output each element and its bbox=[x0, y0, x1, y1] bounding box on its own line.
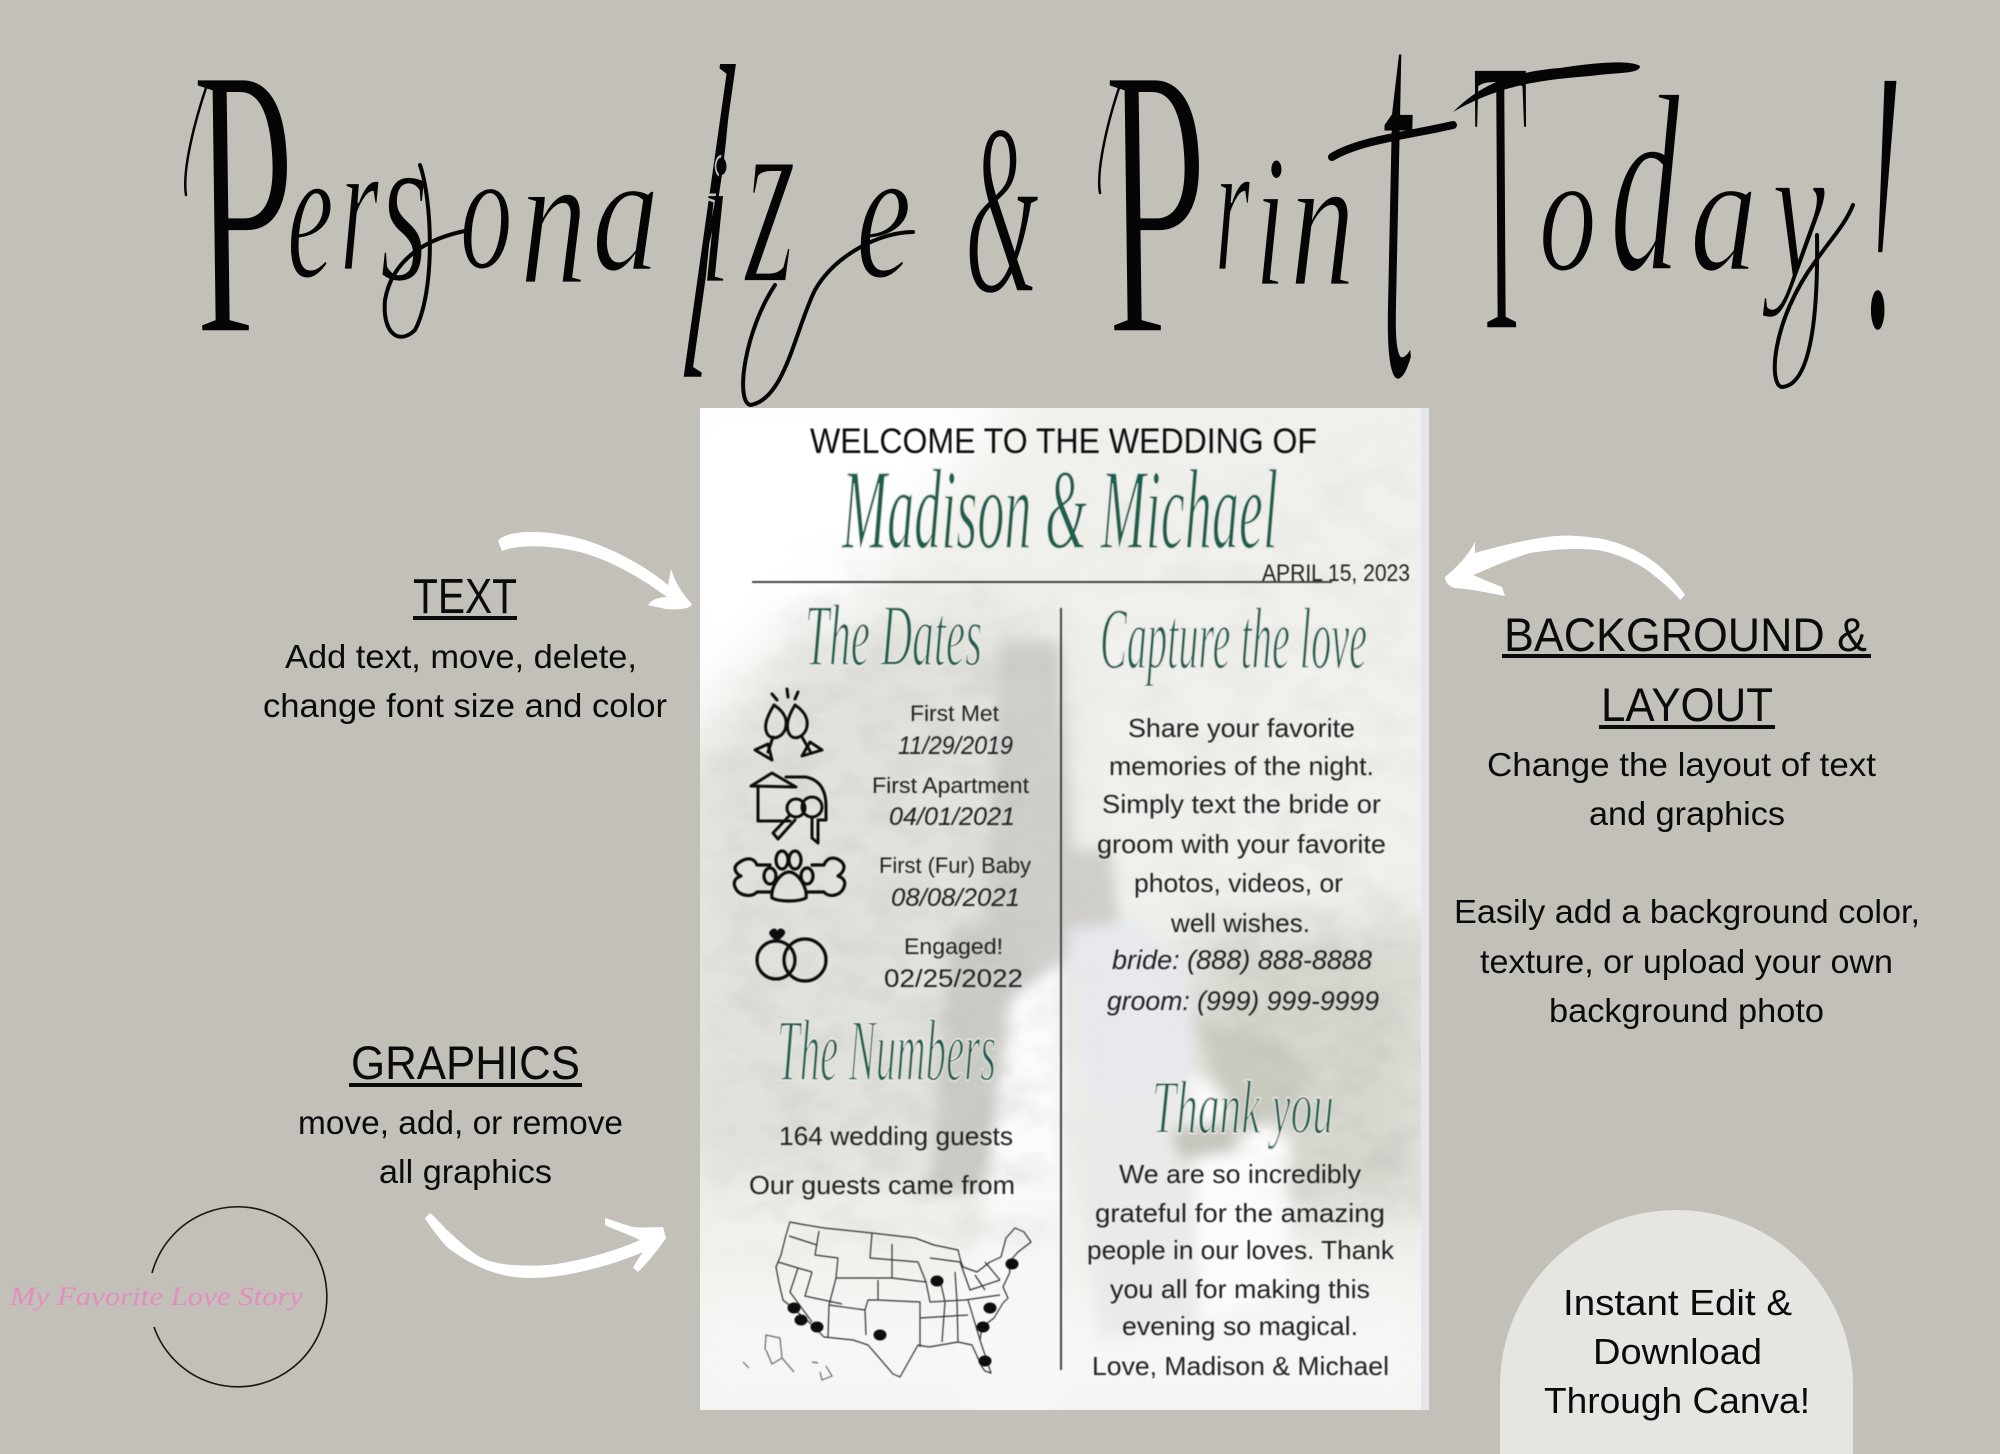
capture the love text: bride: (888) 888-8888 bbox=[1112, 945, 1372, 975]
milestone dates: 02/25/2022 bbox=[884, 965, 1023, 993]
thank you text: you all for making this bbox=[1110, 1274, 1370, 1304]
title: Personalize & Print Today!: e bbox=[287, 109, 334, 319]
title: Personalize & Print Today!: o bbox=[1539, 120, 1596, 307]
title: Personalize & Print Today!: & bbox=[965, 74, 1039, 346]
capture the love text: photos, videos, or bbox=[1134, 868, 1343, 898]
title: Personalize & Print Today!: i bbox=[700, 113, 731, 324]
title: Personalize & Print Today!: a bbox=[1690, 119, 1757, 308]
thank you text: Love, Madison & Michael bbox=[1092, 1351, 1389, 1381]
title: Personalize & Print Today! bbox=[167, 0, 1903, 503]
milestone dates: First (Fur) Baby bbox=[879, 853, 1031, 878]
arrow: background callout to card bbox=[1445, 536, 1685, 600]
title: Personalize & Print Today!: r bbox=[1215, 103, 1251, 312]
callout: TEXT bbox=[263, 570, 667, 724]
title: Personalize & Print Today!: y bbox=[1762, 104, 1825, 319]
callout: GRAPHICS: GRAPHICS bbox=[351, 1036, 580, 1089]
logo circle bbox=[152, 1207, 327, 1387]
thank you text: people in our loves. Thank bbox=[1087, 1235, 1395, 1265]
capture the love text: memories of the night. bbox=[1109, 751, 1374, 781]
icon: wedding rings bbox=[757, 928, 826, 981]
capture the love text: Simply text the bride or bbox=[1102, 789, 1381, 819]
heading: The Dates: The Dates bbox=[805, 586, 982, 684]
callout: BACKGROUND & LAYOUT: LAYOUT bbox=[1601, 678, 1773, 731]
callout: TEXT: TEXT bbox=[413, 570, 517, 624]
panel: sample wedding program card bbox=[660, 380, 1440, 1420]
logo: My Favorite Love Story bbox=[9, 1207, 327, 1387]
arrow: text callout to card bbox=[498, 532, 692, 609]
callout: BACKGROUND & LAYOUT: Change the layout of text bbox=[1487, 746, 1876, 783]
title: Personalize & Print Today!: z bbox=[743, 52, 796, 339]
callout: BACKGROUND & LAYOUT: Easily add a background color, bbox=[1454, 893, 1920, 930]
title: Personalize & Print Today!: r bbox=[340, 101, 380, 311]
title: Personalize & Print Today!: d bbox=[1610, 44, 1681, 326]
thank you text: grateful for the amazing bbox=[1095, 1198, 1385, 1228]
logo wordmark: My Favorite Love Story bbox=[9, 1282, 304, 1311]
callout: BACKGROUND & LAYOUT: texture, or upload your own bbox=[1480, 943, 1893, 980]
milestone dates bbox=[872, 701, 1031, 993]
milestone dates: 08/08/2021 bbox=[891, 884, 1020, 912]
wedding date: APRIL 15, 2023 bbox=[1262, 560, 1410, 587]
capture the love text: well wishes. bbox=[1170, 908, 1310, 938]
heading rule bbox=[752, 581, 1332, 583]
milestone dates: 11/29/2019 bbox=[898, 732, 1013, 760]
card text content bbox=[734, 422, 1410, 1381]
couple names script: Madison & Michael bbox=[841, 447, 1278, 574]
guest numbers: 164 wedding guests bbox=[779, 1121, 1013, 1151]
capture the love text: groom: (999) 999-9999 bbox=[1107, 986, 1379, 1016]
title: Personalize & Print Today!: e bbox=[856, 108, 911, 318]
callout: GRAPHICS bbox=[298, 1036, 623, 1190]
title: Personalize & Print Today!: ! bbox=[1860, 0, 1903, 410]
thank you text: evening so magical. bbox=[1122, 1311, 1358, 1341]
callout: BACKGROUND & LAYOUT bbox=[1454, 608, 1920, 1029]
callout: TEXT: Add text, move, delete, bbox=[285, 638, 637, 675]
callout: TEXT: change font size and color bbox=[263, 687, 667, 724]
title: Personalize & Print Today!: a bbox=[592, 119, 659, 308]
card photo background bbox=[660, 380, 1440, 1420]
milestone dates: 04/01/2021 bbox=[889, 803, 1015, 831]
thank you text: We are so incredibly bbox=[1119, 1159, 1361, 1189]
badge: Instant Edit & Download bbox=[1500, 1210, 1853, 1454]
capture the love text: Share your favorite bbox=[1128, 713, 1355, 743]
badge: Instant Edit & Download: Instant Edit & bbox=[1563, 1282, 1792, 1323]
badge: Instant Edit & Download: Download bbox=[1593, 1331, 1762, 1372]
title: Personalize & Print Today!: n bbox=[1290, 117, 1355, 327]
guest numbers: Our guests came from bbox=[749, 1170, 1015, 1200]
callout: BACKGROUND & LAYOUT: BACKGROUND & bbox=[1504, 608, 1867, 661]
milestone dates: Engaged! bbox=[904, 934, 1003, 959]
title: Personalize & Print Today!: o bbox=[460, 116, 512, 305]
title: Personalize & Print Today!: n bbox=[520, 114, 588, 325]
arrow: graphics callout to card bbox=[425, 1213, 666, 1278]
heading: The Numbers: The Numbers bbox=[777, 1001, 996, 1099]
icon: clinking glasses bbox=[755, 689, 822, 760]
title decorative swashes bbox=[185, 62, 1853, 405]
heading: Capture the love: Capture the love bbox=[1100, 589, 1367, 687]
title: Personalize & Print Today!: i bbox=[1255, 116, 1286, 327]
map outline and state lines bbox=[743, 1222, 1031, 1380]
callout: GRAPHICS: all graphics bbox=[379, 1153, 552, 1190]
heading: Thank you: Thank you bbox=[1152, 1065, 1334, 1149]
thank you text bbox=[1087, 1159, 1395, 1381]
card heading: WELCOME TO THE WEDDING OF bbox=[810, 422, 1317, 461]
callout: GRAPHICS: move, add, or remove bbox=[298, 1104, 623, 1141]
callout: BACKGROUND & LAYOUT: background photo bbox=[1549, 992, 1824, 1029]
map location dots bbox=[788, 1258, 1018, 1366]
column divider bbox=[1060, 608, 1062, 1370]
icon: paw and bones bbox=[734, 851, 845, 901]
capture the love text bbox=[1097, 713, 1386, 1016]
callout: BACKGROUND & LAYOUT: and graphics bbox=[1589, 795, 1785, 832]
icon: house and keys bbox=[751, 773, 826, 843]
guest numbers bbox=[749, 1121, 1015, 1200]
title: Personalize & Print Today!: s bbox=[380, 84, 429, 328]
milestone dates: First Met bbox=[910, 701, 999, 726]
badge: Instant Edit & Download: Through Canva! bbox=[1544, 1380, 1810, 1421]
capture the love text: groom with your favorite bbox=[1097, 829, 1386, 859]
map: guest home locations in the US bbox=[743, 1222, 1031, 1380]
milestone dates: First Apartment bbox=[872, 773, 1029, 798]
